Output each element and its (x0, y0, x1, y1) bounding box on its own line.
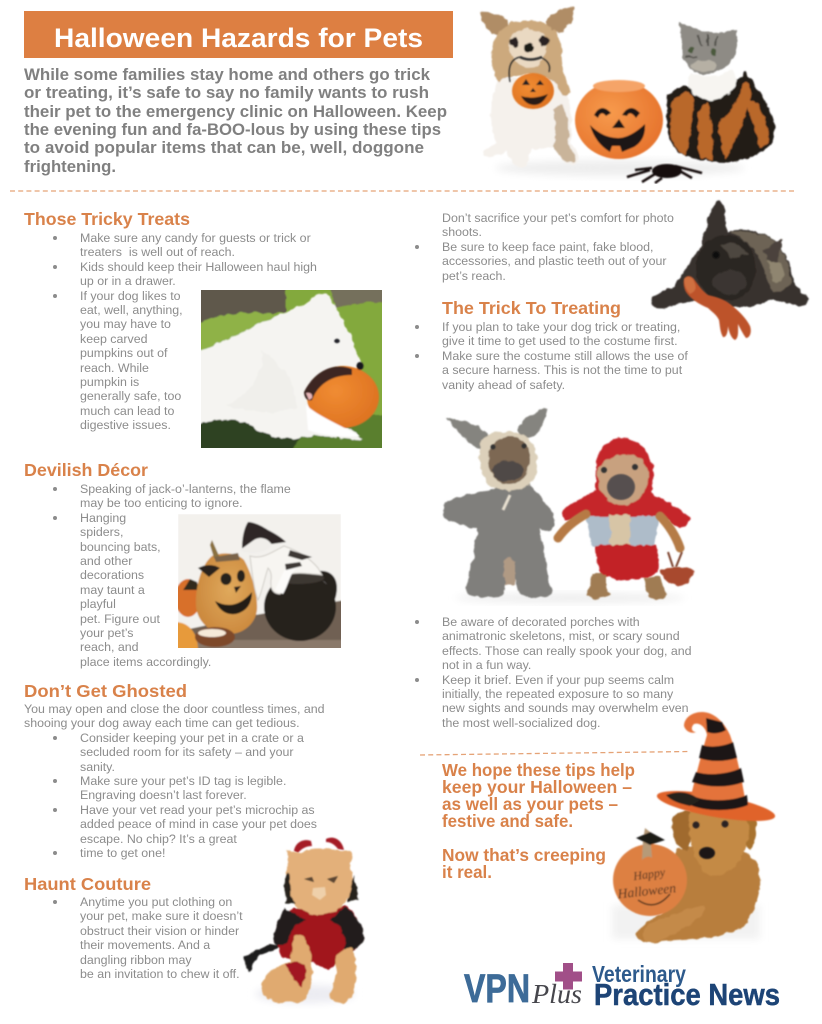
text: comfort (442, 211, 674, 239)
bullet: decorations: decorations (80, 568, 144, 582)
photo: wolf and Red Riding Hood dogs (442, 407, 696, 603)
bullet: decorations: may taunt a (80, 583, 145, 597)
bullet: decorations: your pet’s (80, 626, 134, 640)
section: The Trick To Treating (415, 320, 688, 392)
intro text: shooing your dog away each time can get tedious. (24, 716, 300, 730)
bullet: decorations: bouncing bats, (80, 540, 161, 554)
bullet: harness: vanity ahead of safety. (442, 378, 565, 392)
bullet: decorations: spiders, (80, 525, 123, 539)
closing message: it real. (442, 862, 492, 882)
big pumpkin (575, 81, 663, 159)
bullet: harness (386, 349, 666, 392)
wolf (447, 408, 548, 450)
spider (652, 164, 682, 178)
closing message: We hope these tips help (442, 760, 635, 780)
logo mark: VPN: VPN (464, 967, 530, 1011)
text: comfort: Don’t sacrifice your pet’s comfort for photo (442, 211, 674, 225)
bullet: ID tag (24, 774, 334, 803)
heading: Those Tricky Treats: Those Tricky Treats (24, 209, 190, 229)
bullet: decorations: pet. Figure out (80, 612, 160, 626)
kitten head (680, 23, 737, 74)
logo mark: plus sign (555, 963, 582, 990)
heading: The Trick To Treating: The Trick To Treating (442, 298, 621, 318)
bullet: crate: secluded room for its safety – and your (80, 745, 294, 759)
section: Don't Get Ghosted (24, 702, 325, 860)
photo: French bulldog with fake hand (650, 199, 810, 341)
intro text: You may open and close the door countless times, and (24, 702, 325, 716)
bullet: keep it brief: Keep it brief. Even if your pup seems calm (442, 673, 674, 687)
bullet: keep it brief: initially, the repeated exposure to so many (442, 687, 673, 701)
bullet: ID tag: Make sure your pet’s ID tag is legible. (80, 774, 286, 788)
bullet: get used to costume: give it time to get used to the costume first. (442, 334, 678, 348)
bullet: decorations: reach, and (80, 640, 139, 654)
bullet: candy: Make sure any candy for guests or trick or (80, 231, 311, 245)
intro paragraph: to avoid popular items that can be, well, doggone (24, 138, 424, 157)
bullet: pumpkins: pumpkin is (80, 375, 139, 389)
bullet: microchip: Have your vet read your pet’s microchip as (80, 803, 315, 817)
bullet: clothing: obstruct their vision or hinder (80, 924, 239, 938)
bullet: pumpkins: keep carved (80, 332, 148, 346)
kitten skirt (666, 72, 774, 162)
bullet: get used to costume: If you plan to take your dog trick or treating, (442, 320, 680, 334)
photo: cat on jack-o'-lantern and pot (178, 514, 341, 648)
bullet: microchip (24, 803, 334, 846)
bullet: clothing: your pet, make sure it doesn’t (80, 909, 243, 923)
bullet: pumpkins: reach. While (80, 361, 149, 375)
bullet: clothing: be an invitation to chew it off. (80, 967, 240, 981)
intro paragraph (24, 65, 447, 176)
chihuahua (483, 78, 579, 167)
bullet: pumpkins: generally safe, too (80, 389, 181, 403)
bullet: pumpkins: much can lead to (80, 404, 174, 418)
bullet: pumpkins: you may have to (80, 317, 171, 331)
intro paragraph: the evening fun and fa-BOO-lous by using these tips (24, 120, 441, 139)
bullet: crate: Consider keeping your pet in a crate or a (80, 731, 304, 745)
bullet: decorations: and other (80, 554, 132, 568)
intro paragraph: their pet to the emergency clinic on Halloween. Keep (24, 102, 447, 121)
logo wordmark: Practice News: Practice News (594, 977, 780, 1012)
section: costume comfort (415, 211, 674, 283)
bullet: decorations: place items accordingly. (80, 655, 211, 669)
bullet: keep it brief (386, 673, 676, 730)
bullet: porches: effects. Those can really spook your dog, and (442, 644, 692, 658)
bullet: decorations (24, 511, 324, 669)
bullet: face paint: accessories, and plastic teeth out of your (442, 254, 667, 268)
bullet: harness: a secure harness. This is not the time to put (442, 363, 682, 377)
bullet: pumpkins: pumpkins out of (80, 346, 167, 360)
closing message: as well as your pets – (442, 794, 618, 814)
logo: VPN Plus and Veterinary Practice News (464, 961, 780, 1012)
bullet: pumpkins: If your dog likes to (80, 289, 181, 303)
bullet: porches: animatronic skeletons, mist, or scary sound (442, 629, 680, 643)
bullet: pumpkins: digestive issues. (80, 418, 171, 432)
bullet: porches (386, 615, 676, 673)
bullet: clothing: Anytime you put clothing on (80, 895, 232, 909)
bullet: flame (24, 482, 324, 511)
bullet: microchip: added peace of mind in case your pet does (80, 817, 317, 831)
intro paragraph: frightening. (24, 157, 116, 176)
bullet: flame: Speaking of jack-o’-lanterns, the flame (80, 482, 291, 496)
bullet: haul (24, 260, 324, 289)
title banner: Halloween Hazards for Pets (54, 23, 423, 53)
bullet: ID tag: Engraving doesn’t last forever. (80, 788, 247, 802)
bullet: face paint (386, 240, 656, 283)
photo: cat in devil costume (242, 836, 366, 1005)
bullet: crate (24, 731, 334, 774)
heading: Haunt Couture: Haunt Couture (24, 874, 151, 894)
title banner (24, 11, 453, 58)
photo: puppy in witch hat with pumpkin (612, 710, 776, 944)
closing message: festive and safe. (442, 811, 573, 831)
bullet: porches: not in a fun way. (442, 658, 531, 672)
photo: puppy in witch hat with pumpkin: Halloween (616, 880, 677, 901)
bullet: candy (24, 231, 324, 260)
bullet: harness: Make sure the costume still allows the use of (442, 349, 688, 363)
bullet: porches: Be aware of decorated porches with (442, 615, 640, 629)
bullet: crate: sanity. (80, 760, 115, 774)
bullet: pumpkins (24, 289, 324, 433)
bullet: face paint: pet’s reach. (442, 269, 506, 283)
photo: chihuahua and kitten with pumpkin (479, 6, 777, 184)
bullet: decorations: Hanging (80, 511, 126, 525)
logo mark: Plus script: Plus (531, 979, 582, 1009)
heading: Devilish Décor: Devilish Décor (24, 460, 148, 480)
text: comfort: shoots. (442, 225, 482, 239)
bullet: keep it brief: new sights and sounds may overwhelm even (442, 701, 689, 715)
closing message: Now that’s creeping (442, 845, 606, 865)
photo: white dog biting pumpkin (201, 290, 382, 448)
intro text (24, 702, 325, 730)
bullet: decorations: playful (80, 597, 116, 611)
bullet: flame: may be too enticing to ignore. (80, 496, 243, 510)
bullet: time: time to get one! (80, 846, 165, 860)
bullet: haul: up or in a drawer. (80, 274, 176, 288)
closing message: keep your Halloween – (442, 777, 632, 797)
heading: Don't Get Ghosted: Don’t Get Ghosted (24, 681, 187, 701)
intro paragraph: While some families stay home and others go trick (24, 65, 431, 84)
bullet: candy: treaters is well out of reach. (80, 245, 235, 259)
bullet: microchip: escape. No chip? It’s a great (80, 832, 237, 846)
section: Devilish Décor (53, 482, 291, 669)
bullet: clothing: their movements. And a (80, 938, 210, 952)
red riding hood (563, 438, 690, 528)
bullet: pumpkins: eat, well, anything, (80, 303, 183, 317)
bullet: face paint: Be sure to keep face paint, fake blood, (442, 240, 653, 254)
logo wordmark: Veterinary: Veterinary (592, 961, 686, 987)
intro paragraph: or treating, it’s safe to say no family wants to rush (24, 83, 429, 102)
bullet: keep it brief: the most well-socialized dog. (442, 716, 600, 730)
bullet: get used to costume (386, 320, 666, 349)
section: Haunt Couture (53, 895, 243, 981)
photo: puppy in witch hat with pumpkin: Happy (631, 865, 667, 883)
closing message (442, 760, 635, 882)
section: Those Tricky Treats (53, 231, 317, 432)
bullet: haul: Kids should keep their Halloween haul high (80, 260, 317, 274)
witch hat (655, 785, 777, 827)
bullet: clothing (24, 895, 254, 981)
section: porches and brevity (415, 615, 692, 730)
bullet: clothing: dangling ribbon may (80, 953, 192, 967)
